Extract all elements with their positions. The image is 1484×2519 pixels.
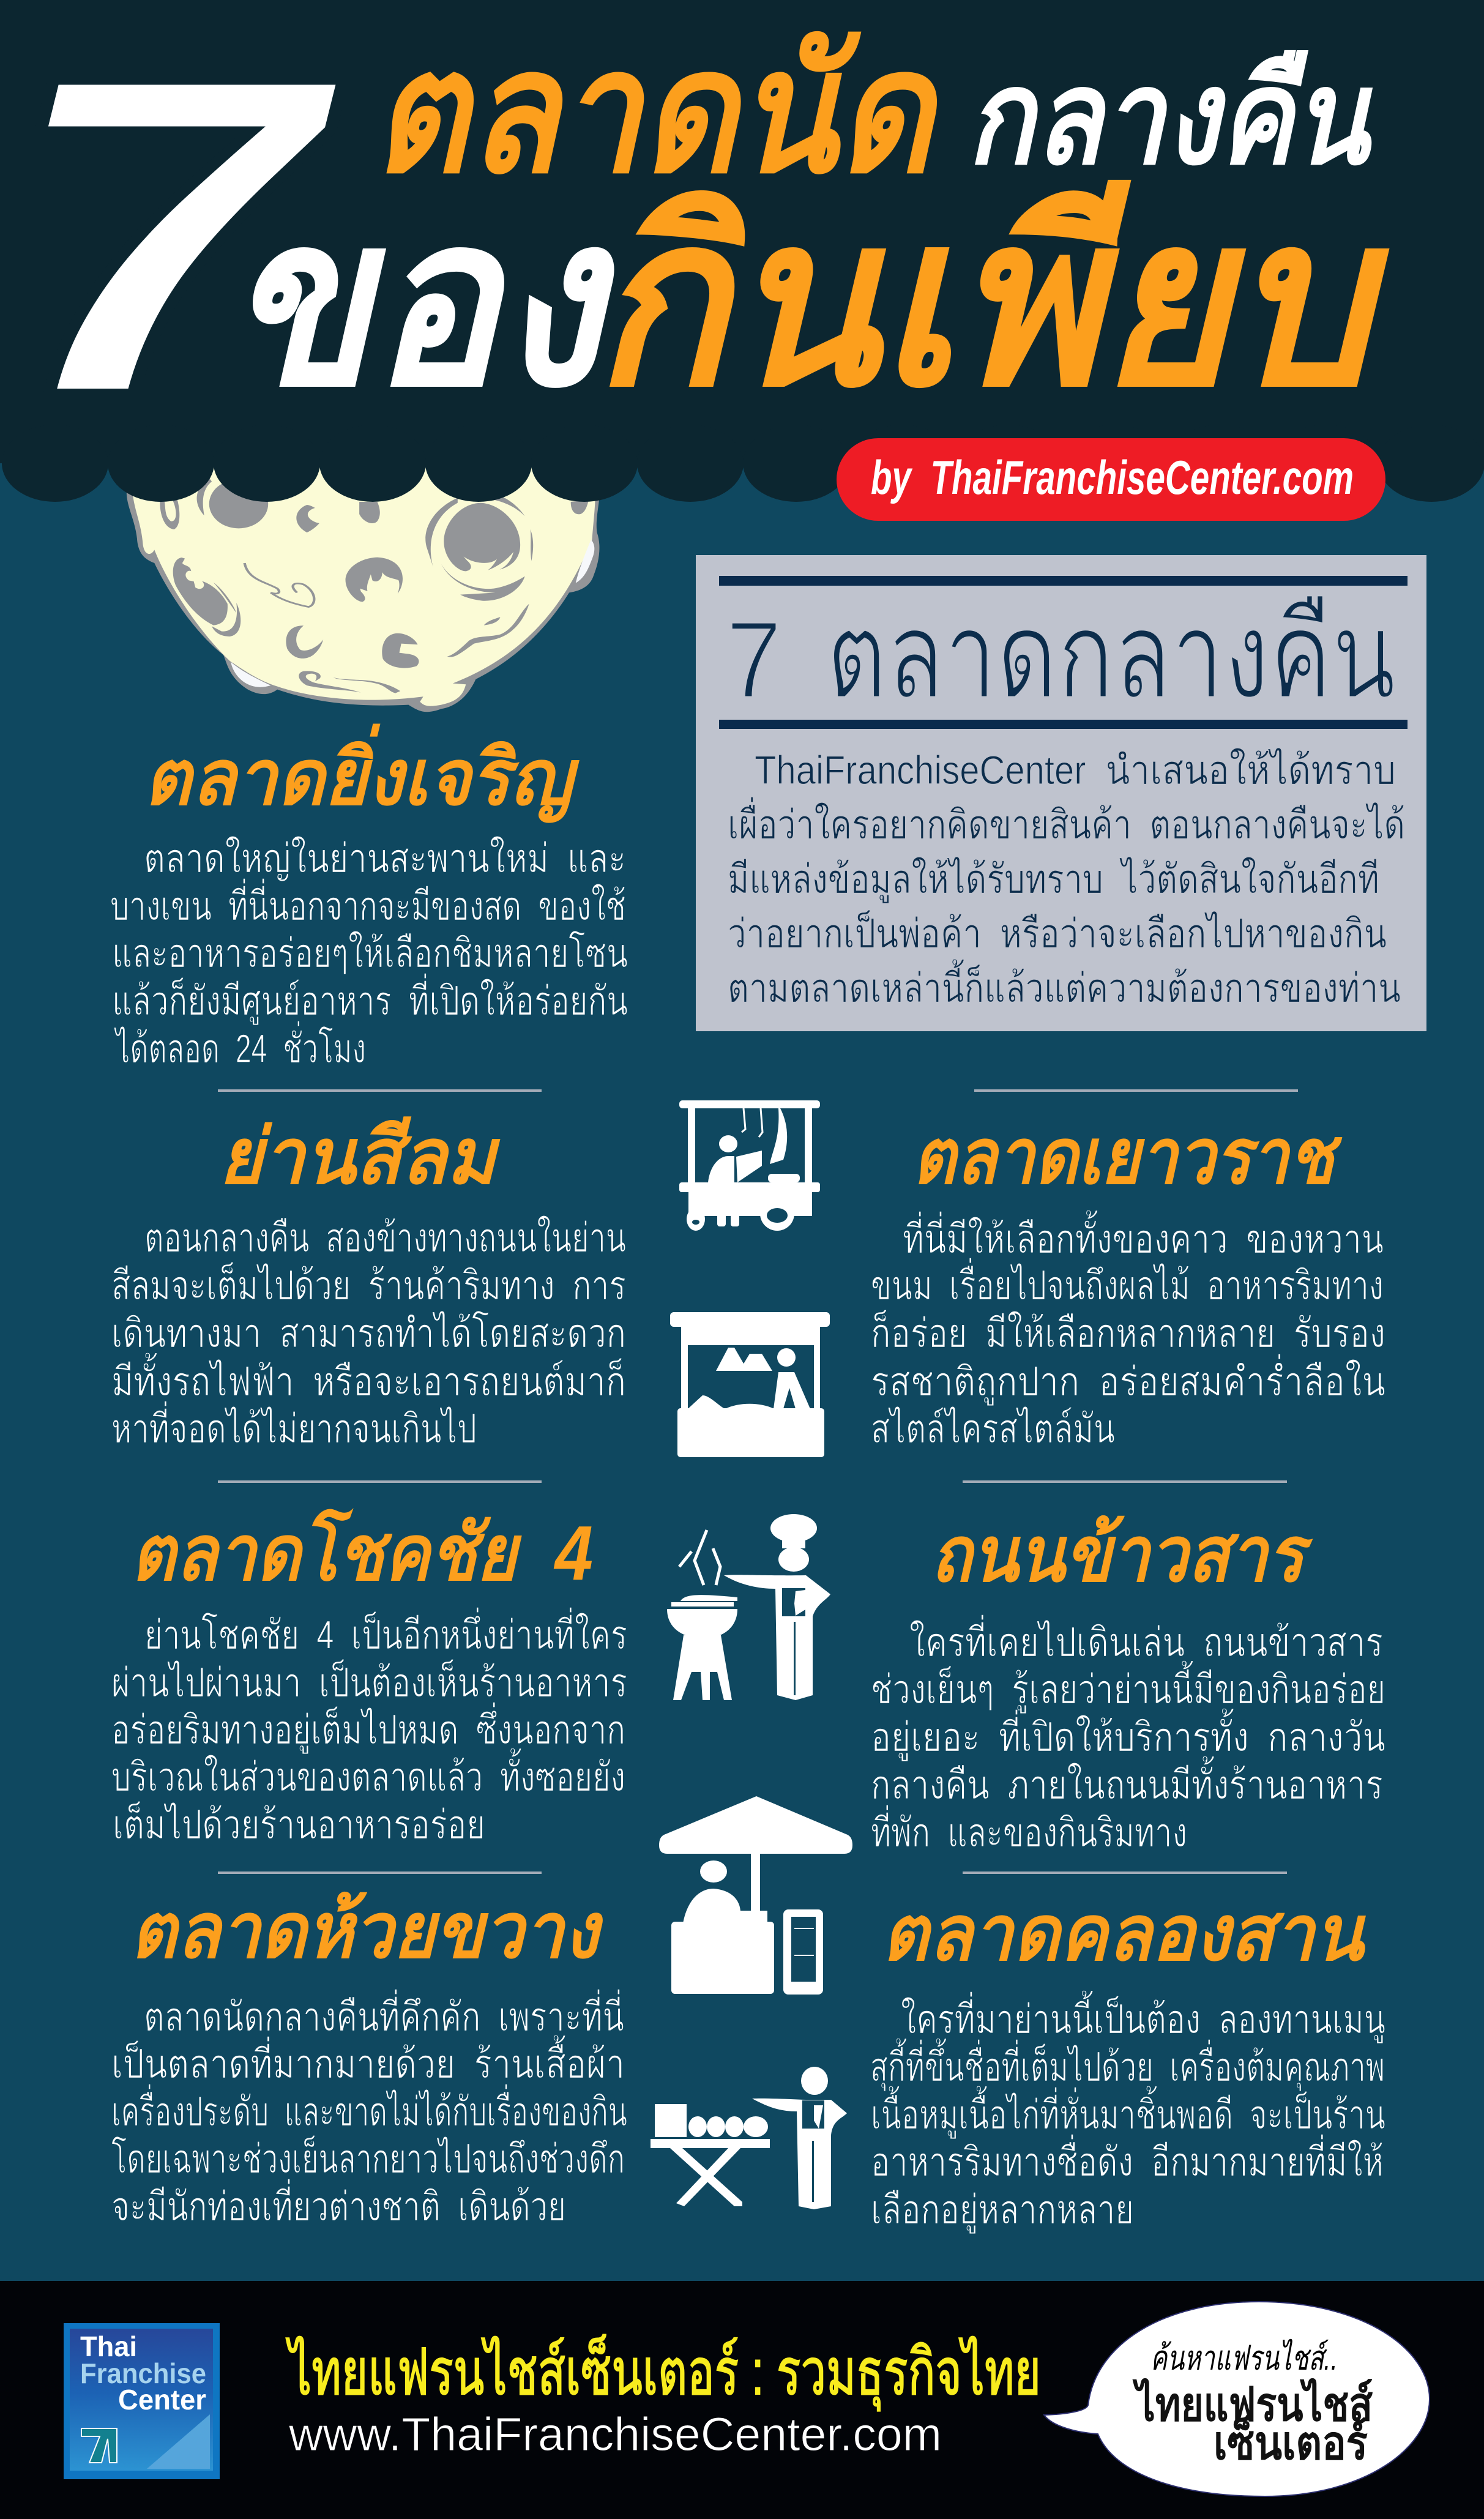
- heading: ถนนข้าวสาร: [931, 1511, 1313, 1597]
- body text: [871, 1210, 1385, 1451]
- section: ถนนข้าวสาร: [871, 1511, 1385, 1855]
- body text: กลางคืน ภายในถนนมีทั้งร้านอาหาร: [871, 1756, 1383, 1807]
- icon: food cart with vendor: [679, 1100, 820, 1231]
- section: ตลาดห้วยขวาง: [111, 1887, 627, 2229]
- body text: บริเวณในส่วนของตลาดแล้ว ทั้งซอยยัง: [111, 1748, 625, 1799]
- section: ตลาดโชคชัย 4: [111, 1508, 627, 1847]
- title word: กินเพียบ: กินเพียบ: [594, 170, 1392, 433]
- title word: ของ: ของ: [227, 170, 617, 433]
- body text: [111, 1989, 627, 2229]
- icon: market stall with vendor: [670, 1312, 830, 1457]
- body text: โดยเฉพาะช่วงเย็นลากยาวไปจนถึงช่วงดึก: [111, 2135, 625, 2181]
- footer logo: Franchise: [80, 2357, 206, 2389]
- body text: เดินทางมา สามารถทำได้โดยสะดวก: [111, 1310, 626, 1356]
- section: ตลาดยิ่งเจริญ: [110, 723, 628, 1071]
- heading: ตลาดยิ่งเจริญ: [144, 723, 580, 823]
- heading: ตลาดโชคชัย 4: [131, 1508, 593, 1596]
- icon: chef at barbecue grill: [667, 1514, 830, 1700]
- body text: และอาหารอร่อยๆให้เลือกชิมหลายโซน: [112, 930, 628, 976]
- section: ย่านสีลม: [111, 1113, 626, 1451]
- body text: ตลาดใหญ่ในย่านสะพานใหม่ และ: [144, 835, 626, 881]
- footer logo: Thai: [80, 2331, 137, 2362]
- icon: waiter with table of dishes: [651, 2067, 847, 2209]
- footer headline: ไทยแฟรนไชส์เซ็นเตอร์ : รวมธุรกิจไทย: [286, 2335, 1041, 2411]
- body text: เลือกอยู่หลากหลาย: [871, 2187, 1134, 2234]
- body text: เต็มไปด้วยร้านอาหารอร่อย: [113, 1801, 485, 1847]
- body text: ที่พัก และของกินริมทาง: [871, 1805, 1187, 1855]
- panel: intro box: [696, 555, 1426, 1031]
- body text: มีทั้งรถไฟฟ้า หรือจะเอารถยนต์มาก็: [111, 1353, 626, 1404]
- intro box text: ThaiFranchiseCenter นำเสนอให้ได้ทราบ: [755, 747, 1396, 793]
- speech bubble: [1044, 2302, 1430, 2496]
- speech bubble: ค้นหาแฟรนไชส์..: [1150, 2338, 1338, 2377]
- body text: อร่อยริมทางอยู่เต็มไปหมด ซึ่งนอกจาก: [111, 1702, 625, 1755]
- speech bubble: เซ็นเตอร์: [1214, 2415, 1368, 2469]
- header band with scalloped edge: [0, 0, 1484, 502]
- body text: [111, 1215, 626, 1451]
- intro box heading: 7: [726, 599, 782, 722]
- section: ตลาดคลองสาน: [870, 1890, 1385, 2234]
- section: ตลาดเยาวราช: [871, 1113, 1385, 1451]
- title word: ตลาดนัด: ตลาดนัด: [373, 17, 941, 207]
- heading: ย่านสีลม: [219, 1113, 501, 1200]
- body text: หาที่จอดได้ไม่ยากจนเกินไป: [111, 1401, 477, 1451]
- heading: ตลาดคลองสาน: [882, 1890, 1367, 1976]
- body text: อยู่เยอะ ที่เปิดให้บริการทั้ง กลางวัน: [871, 1708, 1385, 1762]
- title word: กลางคืน: กลางคืน: [967, 43, 1373, 191]
- illustration: full moon: [127, 453, 600, 712]
- body text: ผ่านไปผ่านมา เป็นต้องเห็นร้านอาหาร: [111, 1659, 627, 1705]
- body text: แล้วก็ยังมีศูนย์อาหาร ที่เปิดให้อร่อยกัน: [112, 973, 628, 1026]
- icon: vendor under umbrella with fridge: [659, 1796, 852, 1995]
- body text: บางเขน ที่นี่นอกจากจะมีของสด ของใช้: [110, 878, 626, 928]
- speech bubble: ไทยแฟรนไชส์: [1132, 2378, 1373, 2431]
- body text: สีลมจะเต็มไปด้วย ร้านค้าริมทาง การ: [111, 1261, 626, 1308]
- footer url: www.ThaiFranchiseCenter.com: [288, 2408, 942, 2461]
- body text: [870, 1990, 1385, 2234]
- byline pill: [837, 438, 1385, 521]
- body text: รสชาติถูกปาก อร่อยสมคำร่ำลือใน: [871, 1354, 1385, 1406]
- body text: [871, 1614, 1385, 1855]
- body text: ย่านโชคชัย 4 เป็นอีกหนึ่งย่านที่ใคร: [144, 1607, 627, 1657]
- body text: [111, 1607, 627, 1847]
- body text: สไตล์ไครสไตล์มัน: [871, 1406, 1115, 1451]
- body text: เครื่องประดับ และขาดไม่ได้กับเรื่องของกิน: [111, 2084, 627, 2134]
- heading: ตลาดห้วยขวาง: [130, 1887, 604, 1974]
- footer band: [0, 2281, 1484, 2519]
- title: [1, 0, 1392, 490]
- body text: เป็นตลาดที่มากมายด้วย ร้านเสื้อผ้า: [111, 2035, 625, 2086]
- body text: ตอนกลางคืน สองข้างทางถนนในย่าน: [144, 1215, 626, 1260]
- body text: ใครที่เคยไปเดินเล่น ถนนข้าวสาร: [909, 1614, 1383, 1665]
- footer logo: [64, 2323, 220, 2479]
- body text: [110, 835, 628, 1071]
- body text: ตลาดนัดกลางคืนที่คึกคัก เพราะที่นี่: [144, 1989, 624, 2039]
- footer logo: Center: [118, 2384, 206, 2416]
- body text: ได้ตลอด 24 ชั่วโมง: [113, 1021, 366, 1071]
- body text: ที่นี่มีให้เลือกทั้งของคาว ของหวาน: [903, 1210, 1384, 1261]
- heading: ตลาดเยาวราช: [912, 1113, 1342, 1200]
- intro box text: [728, 747, 1405, 1010]
- body text: จะมีนักท่องเที่ยวต่างชาติ เดินด้วย: [111, 2179, 566, 2229]
